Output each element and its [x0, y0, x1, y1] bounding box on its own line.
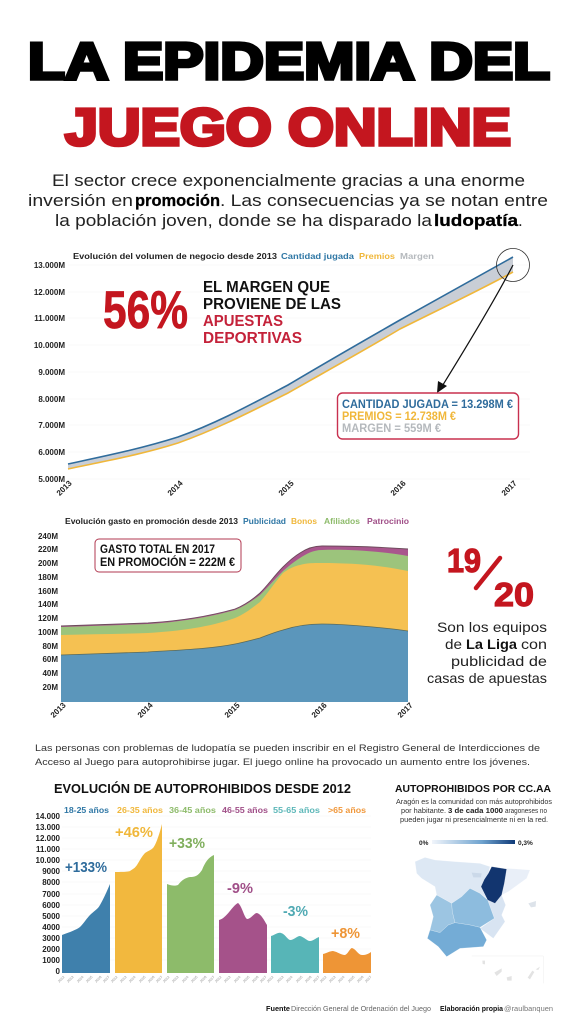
chart 2 heading and legend: Patrocinio	[367, 516, 409, 526]
map legend	[419, 840, 533, 847]
area: 46-55 años	[219, 903, 267, 973]
chart 3 y axis: 13.000	[36, 823, 61, 832]
choropleth map of Spain	[415, 857, 543, 983]
chart 2 y axis: 40M	[42, 669, 58, 678]
chart 3 y axis: 8000	[42, 878, 61, 887]
stat: 19/20: 19	[447, 542, 481, 579]
arrow to callout	[437, 265, 513, 393]
chart 2 y axis: 180M	[38, 573, 58, 582]
map description: 3 de cada 1000	[448, 808, 503, 815]
percentage labels: +46%	[115, 824, 153, 841]
callout: 2017 totals	[338, 393, 518, 439]
56% description: EL MARGEN QUE	[203, 279, 330, 296]
stat: 19/20	[447, 542, 534, 613]
chart 2 y axis: 200M	[38, 559, 58, 568]
map description	[396, 799, 553, 824]
chart 3 legend: 55-65 años	[273, 805, 320, 815]
chart 3 legend: >65 años	[328, 805, 366, 815]
intro text	[28, 171, 548, 230]
intro text: .	[518, 211, 523, 230]
chart 2 heading and legend: Publicidad	[243, 516, 286, 526]
chart 2 heading and legend: Afiliados	[324, 516, 360, 526]
chart 1 x axis: 2014	[166, 478, 185, 498]
percentage labels: -3%	[283, 903, 308, 920]
chart 2 heading and legend: Bonos	[291, 516, 317, 526]
panel: volumen de negocio	[34, 248, 530, 498]
chart 1 y axis: 8.000M	[38, 395, 65, 404]
callout: 2017 totals: CANTIDAD JUGADA = 13.298M €	[342, 399, 514, 411]
tiny year ticks: 2013	[119, 975, 127, 983]
tiny year ticks: 2013	[223, 975, 231, 983]
chart 2 y axis	[38, 532, 58, 692]
chart 2 heading and legend: Evolución gasto en promoción desde 2013	[65, 516, 238, 526]
56% description: PROVIENE DE LAS	[203, 296, 341, 313]
tiny year ticks: 2013	[276, 975, 284, 983]
chart 2 x axis: 2017	[396, 700, 415, 720]
tiny year ticks	[57, 975, 372, 983]
chart 2 x axis: 2015	[223, 700, 242, 720]
body text: Las personas con problemas de ludopatía se pueden inscribir en el Registro General de Interdicciones de	[35, 743, 540, 754]
map description: por habitante.	[401, 808, 446, 815]
tiny year ticks: 2016	[251, 975, 259, 983]
area: >65 años	[323, 948, 371, 973]
chart 2 y axis: 240M	[38, 532, 58, 541]
tiny year ticks: 2015	[295, 975, 303, 983]
stat description: La Liga	[466, 636, 517, 652]
stat description: de	[445, 636, 462, 652]
chart 3 y axis: 14.000	[36, 812, 61, 821]
chart 3 y axis: 7000	[42, 890, 61, 899]
stat description: con	[521, 636, 547, 652]
tiny year ticks: 2016	[199, 975, 207, 983]
callout: gasto total: EN PROMOCIÓN = 222M €	[100, 554, 235, 569]
chart 2 x axis: 2014	[136, 700, 155, 720]
chart 2 y axis: 20M	[42, 683, 58, 692]
percentage labels: +8%	[331, 925, 360, 942]
chart 1 y axis: 7.000M	[38, 421, 65, 430]
chart 1 x axis: 2016	[389, 478, 408, 498]
chart 3 y axis: 3000	[42, 934, 61, 943]
tiny year ticks: 2012	[57, 975, 65, 983]
area: 36-45 años	[167, 855, 214, 973]
chart 2 x axis: 2013	[49, 700, 68, 720]
56% description: APUESTAS	[203, 313, 283, 330]
title	[28, 32, 550, 156]
callout: 2017 totals: PREMIOS = 12.738M €	[342, 411, 457, 423]
panel: evolución de autoprohibidos	[36, 781, 372, 983]
chart 2 y axis: 120M	[38, 614, 58, 623]
map legend: 0%	[419, 840, 429, 847]
tiny year ticks: 2017	[102, 975, 110, 983]
body text: Acceso al Juego para autoprohibirse jugar. El juego online ha provocado un aumento entre los jóvenes.	[35, 757, 530, 768]
chart 2 x axis: 2016	[310, 700, 329, 720]
area: 55-65 años	[271, 933, 319, 973]
tiny year ticks: 2012	[214, 975, 222, 983]
callout marker circle	[496, 248, 530, 282]
chart 3 y axis: 2000	[42, 945, 61, 954]
intro text: El sector crece exponencialmente gracias a una enorme	[52, 171, 525, 190]
tiny year ticks: 2017	[207, 975, 215, 983]
intro text: la población joven, donde se ha disparado la	[55, 211, 433, 230]
tiny year ticks: 2014	[76, 975, 84, 983]
chart 1 x axis: 2015	[277, 478, 296, 498]
chart 3 y axis: 5000	[42, 912, 61, 921]
tiny year ticks: 2017	[364, 975, 372, 983]
chart 1 heading and legend: Margen	[400, 251, 434, 261]
footer: credits: Elaboración propia	[440, 1006, 503, 1013]
tiny year ticks: 2015	[190, 975, 198, 983]
tiny year ticks: 2014	[285, 975, 293, 983]
chart 3 y axis: 12.000	[36, 834, 61, 843]
callout: gasto total: GASTO TOTAL EN 2017	[100, 542, 215, 556]
map description: aragoneses no	[505, 808, 547, 815]
tiny year ticks: 2015	[85, 975, 93, 983]
chart 2 y axis: 220M	[38, 545, 58, 554]
percentage labels: +133%	[65, 859, 107, 876]
chart 1 y axis: 11.000M	[34, 314, 65, 323]
intro text: . Las consecuencias ya se notan entre	[220, 191, 548, 210]
chart 1 heading and legend: Evolución del volumen de negocio desde 2013	[73, 251, 277, 261]
chart 3 heading: EVOLUCIÓN DE AUTOPROHIBIDOS DESDE 2012	[54, 781, 351, 796]
map description: pueden jugar ni presencialmente ni en la red.	[400, 817, 548, 824]
chart 3 y axis: 9000	[42, 867, 61, 876]
intro text: promoción	[135, 191, 220, 210]
tiny year ticks: 2015	[138, 975, 146, 983]
footer: credits: Fuente	[266, 1006, 290, 1013]
title: JUEGO ONLINE	[65, 98, 511, 156]
tiny year ticks: 2014	[337, 975, 345, 983]
tiny year ticks: 2017	[155, 975, 163, 983]
chart 3 y axis: 4000	[42, 923, 61, 932]
tiny year ticks: 2017	[259, 975, 267, 983]
callout: 2017 totals: MARGEN = 559M €	[342, 423, 442, 435]
footer: credits: Dirección General de Ordenación del Juego	[291, 1006, 431, 1013]
chart 3 y axis	[36, 812, 371, 976]
chart 1 y axis: 6.000M	[38, 448, 65, 457]
tiny year ticks: 2013	[328, 975, 336, 983]
tiny year ticks: 2017	[312, 975, 320, 983]
footer: credits	[266, 1006, 553, 1013]
stat description: Son los equipos	[437, 619, 547, 635]
chart 2 y axis: 140M	[38, 600, 58, 609]
chart 1 x axis: 2017	[500, 478, 519, 498]
map description: Aragón es la comunidad con más autoprohibidos	[396, 799, 553, 806]
intro text: inversión en	[28, 191, 133, 210]
chart 2 y axis: 80M	[42, 642, 58, 651]
tiny year ticks: 2016	[94, 975, 102, 983]
tiny year ticks: 2012	[162, 975, 170, 983]
chart 2 x axis	[49, 700, 415, 720]
chart 2 y axis: 160M	[38, 587, 58, 596]
panel: gasto en promoción	[38, 516, 415, 720]
tiny year ticks: 2015	[242, 975, 250, 983]
map legend: 0,3%	[518, 840, 533, 847]
tiny year ticks: 2012	[319, 975, 327, 983]
stat description	[427, 619, 547, 686]
chart 3 legend: 36-45 años	[169, 805, 216, 815]
chart 1 x axis: 2013	[55, 478, 74, 498]
56% description	[203, 279, 341, 347]
percentage labels	[65, 824, 360, 942]
chart 2 y axis: 100M	[38, 628, 58, 637]
chart 3 legend: 46-55 años	[222, 805, 268, 815]
area: 18-25 años	[62, 884, 110, 973]
stat description: publicidad de	[451, 653, 547, 669]
panel: autoprohibidos por CC.AA	[395, 783, 553, 983]
body text	[35, 743, 540, 768]
percentage labels: -9%	[227, 880, 253, 897]
line chart: cantidad jugada, premios, margen	[68, 257, 513, 469]
chart 1 heading and legend	[73, 251, 434, 261]
tiny year ticks: 2012	[110, 975, 118, 983]
chart 1 y axis: 5.000M	[38, 475, 65, 484]
intro text: ludopatía	[434, 211, 519, 230]
tiny year ticks: 2016	[356, 975, 364, 983]
tiny year ticks: 2015	[347, 975, 355, 983]
chart 1 y axis	[34, 261, 530, 484]
percentage labels: +33%	[169, 835, 205, 852]
chart 3 legend: 26-35 años	[117, 805, 163, 815]
chart 3 legend	[64, 805, 366, 815]
chart 1 heading and legend: Cantidad jugada	[281, 251, 354, 261]
chart 1 y axis: 13.000M	[34, 261, 65, 270]
chart 3 legend: 18-25 años	[64, 805, 109, 815]
chart 3 y axis: 1000	[42, 956, 61, 965]
tiny year ticks: 2014	[128, 975, 136, 983]
56% description: DEPORTIVAS	[203, 330, 302, 347]
tiny year ticks: 2012	[266, 975, 274, 983]
chart 3 y axis: 11.000	[36, 845, 61, 854]
chart 1 heading and legend: Premios	[359, 251, 395, 261]
tiny year ticks: 2014	[181, 975, 189, 983]
stacked area chart	[61, 546, 408, 702]
56% stat: 56%	[103, 281, 188, 340]
chart 2 y axis: 60M	[42, 655, 58, 664]
stat description: casas de apuestas	[427, 670, 547, 686]
callout: gasto total	[95, 539, 241, 572]
tiny year ticks: 2014	[233, 975, 241, 983]
tiny year ticks: 2013	[171, 975, 179, 983]
title: LA EPIDEMIA DEL	[28, 32, 550, 90]
tiny year ticks: 2016	[147, 975, 155, 983]
area: 26-35 años	[115, 824, 162, 973]
tiny year ticks: 2013	[66, 975, 74, 983]
chart 1 y axis: 10.000M	[34, 341, 65, 350]
chart 3 y axis: 6000	[42, 901, 61, 910]
chart 1 y axis: 12.000M	[34, 288, 65, 297]
chart 3 y axis: 0	[56, 967, 61, 976]
footer: credits: @raulbanquen	[504, 1006, 553, 1013]
tiny year ticks: 2016	[304, 975, 312, 983]
stat: 19/20: 20	[494, 576, 534, 613]
chart 1 x axis	[55, 478, 519, 498]
chart 2 heading and legend	[65, 516, 409, 526]
map heading: AUTOPROHIBIDOS POR CC.AA	[395, 783, 551, 795]
chart 3 y axis: 10.000	[36, 856, 61, 865]
chart 1 y axis: 9.000M	[38, 368, 65, 377]
